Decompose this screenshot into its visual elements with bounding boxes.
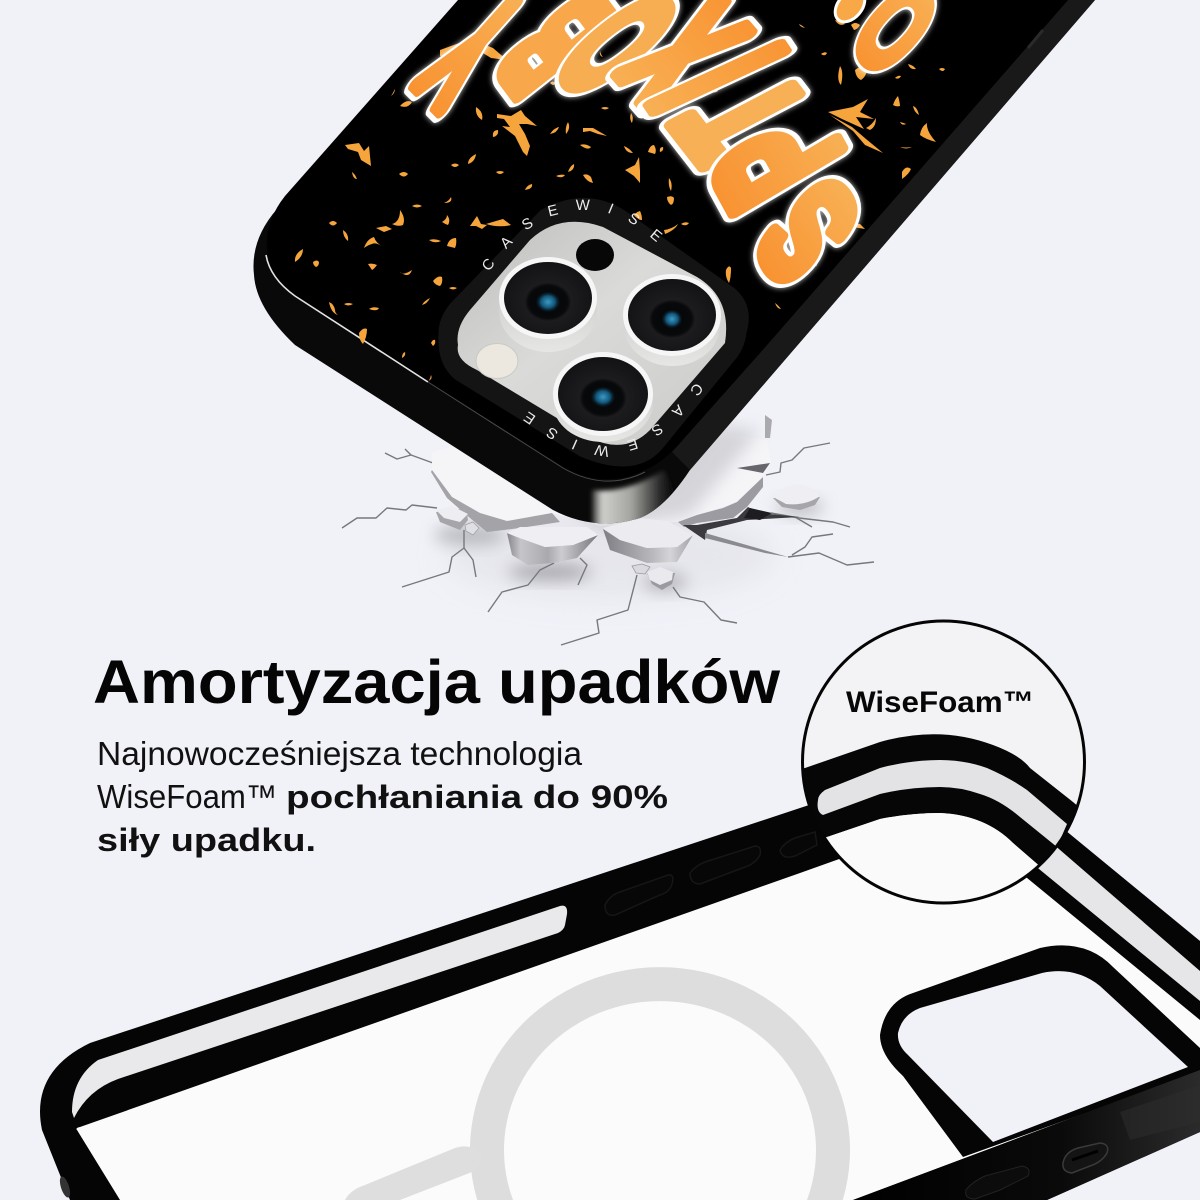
heading: Amortyzacja upadków bbox=[93, 648, 781, 716]
illustration: clear case interior bbox=[40, 752, 1200, 1200]
orange flecks pattern bbox=[295, 20, 945, 381]
camera cutout bbox=[880, 945, 1200, 1157]
callout circle: WiseFoam magnifier bbox=[801, 620, 1086, 904]
body text: Najnowocześniejsza technologia bbox=[97, 735, 583, 772]
lidar hole bbox=[576, 239, 614, 271]
body text bbox=[97, 735, 668, 858]
camera island bbox=[438, 198, 749, 466]
lens 1 bbox=[499, 260, 597, 352]
right side rim bbox=[672, 0, 1095, 470]
liquid logo lettering: P bbox=[676, 83, 876, 238]
gloss reflection on corner bbox=[590, 470, 676, 524]
liquid logo lettering: S bbox=[729, 150, 886, 313]
case clear interior bbox=[76, 818, 1200, 1200]
logo stub at top bbox=[829, 0, 871, 28]
magsafe ring bbox=[470, 967, 850, 1200]
callout label: WiseFoam™ bbox=[846, 686, 1034, 719]
lens 3 bbox=[553, 354, 653, 442]
lens 2 bbox=[624, 276, 720, 366]
case front face bbox=[267, 0, 1068, 479]
liquid logo lettering: I bbox=[611, 22, 825, 133]
body text: siły upadku. bbox=[97, 822, 316, 858]
liquid logo lettering: S bbox=[729, 150, 886, 313]
magnified frame detail bbox=[804, 734, 1076, 864]
clear strip right bbox=[850, 785, 1200, 1001]
bottom band bbox=[853, 1070, 1200, 1200]
illustration: cracked surface under the phone bbox=[342, 415, 874, 645]
camera island: CASEWISE bbox=[523, 384, 702, 457]
liquid logo lettering: P bbox=[676, 83, 876, 238]
flash bbox=[476, 344, 518, 378]
case side button bbox=[1028, 30, 1043, 48]
charging port and lower openings bbox=[58, 1085, 1200, 1199]
phone case body bbox=[253, 0, 1095, 523]
body text: WiseFoam™ bbox=[97, 778, 277, 815]
magsafe bar bbox=[345, 1146, 481, 1200]
side buttons bbox=[605, 832, 817, 915]
liquid logo lettering: I bbox=[611, 22, 825, 133]
body text: pochłaniania do 90% bbox=[286, 779, 668, 815]
liquid logo lettering bbox=[400, 0, 942, 292]
case rim highlight bbox=[266, 255, 428, 382]
clear strip left bbox=[72, 906, 567, 1118]
case outer black frame bbox=[40, 752, 1200, 1200]
illustration: phone in black case hitting the ground bbox=[254, 0, 1095, 524]
island brand text: CASEWISE bbox=[482, 200, 663, 270]
liquid logo lettering: T bbox=[640, 51, 844, 184]
liquid logo lettering: T bbox=[640, 51, 844, 184]
